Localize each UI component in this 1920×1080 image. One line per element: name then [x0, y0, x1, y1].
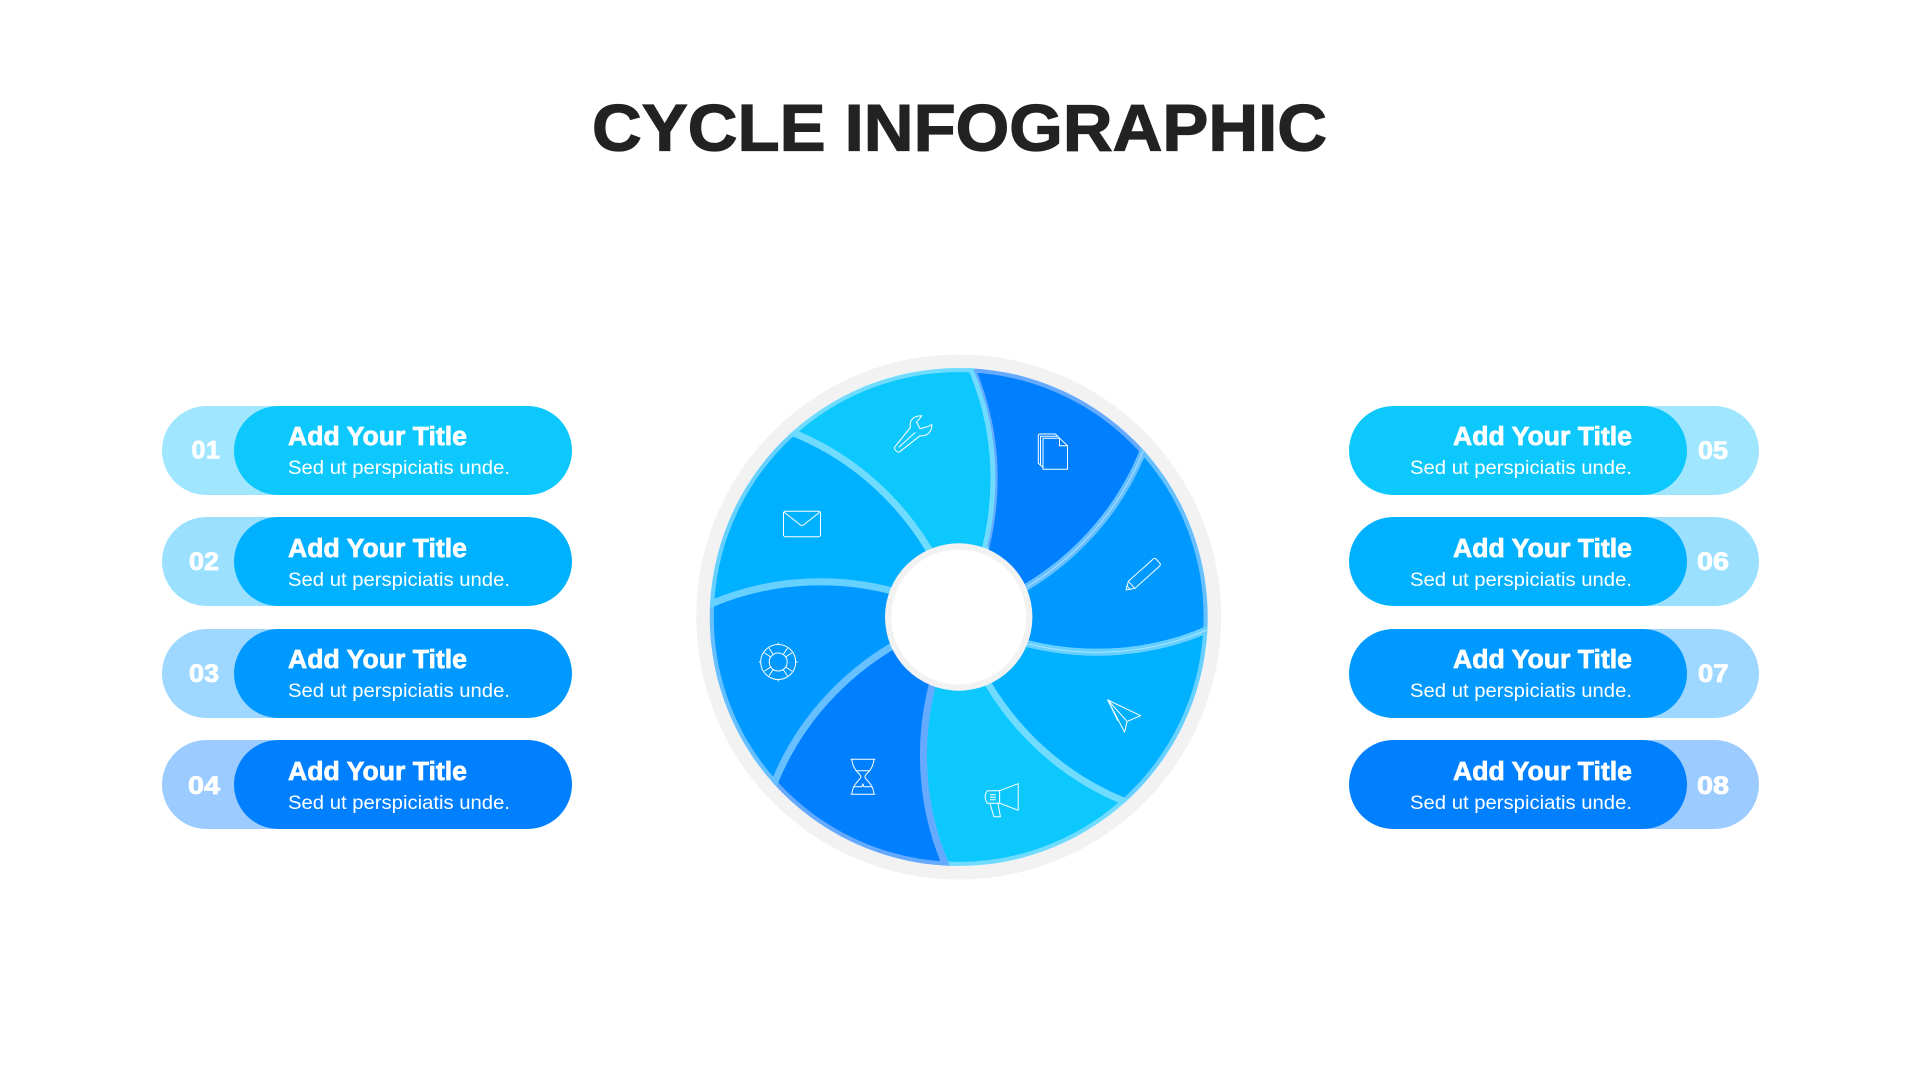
- blade: lifebuoy: [710, 585, 893, 787]
- item 03: Add Your Title: [288, 646, 467, 674]
- item 04: 04: [188, 772, 220, 800]
- item 03: Sed ut perspiciatis unde.: [288, 680, 510, 702]
- item 04: Sed ut perspiciatis unde.: [288, 792, 510, 814]
- item 03: 03: [189, 660, 219, 688]
- blade: document: [972, 369, 1143, 592]
- item 08: Add Your Title: [1453, 758, 1632, 786]
- item 08: Sed ut perspiciatis unde.: [1410, 792, 1632, 814]
- item 08: [1349, 740, 1759, 829]
- outer grey ring: [696, 354, 1221, 880]
- cycle wheel: [696, 354, 1221, 880]
- icon: envelope: [784, 511, 820, 537]
- item 05: 05: [1698, 437, 1728, 465]
- item 02: [162, 517, 572, 606]
- item 01: [162, 406, 572, 495]
- item 03: [162, 629, 572, 718]
- blade: paper plane: [984, 630, 1207, 802]
- blade: envelope: [711, 432, 933, 604]
- item 07: [1349, 629, 1759, 718]
- item 07: 07: [1698, 660, 1728, 688]
- item 06: Sed ut perspiciatis unde.: [1410, 569, 1632, 591]
- icon: paper plane: [1108, 700, 1141, 732]
- icon: pencil: [1123, 558, 1161, 593]
- blade: hourglass: [774, 642, 946, 865]
- item 08: 08: [1697, 772, 1729, 800]
- icon: megaphone: [985, 784, 1018, 817]
- item 05: Add Your Title: [1453, 423, 1632, 451]
- item 01: 01: [192, 436, 220, 464]
- item 02: Add Your Title: [288, 535, 467, 563]
- item 02: 02: [189, 548, 219, 576]
- item 01: Sed ut perspiciatis unde.: [288, 457, 510, 479]
- item 05: [1349, 406, 1759, 495]
- blades: [710, 368, 1208, 866]
- item 06: [1349, 517, 1759, 606]
- blade: megaphone: [926, 683, 1128, 866]
- icon: hourglass: [851, 759, 875, 794]
- item 02: Sed ut perspiciatis unde.: [288, 569, 510, 591]
- icon: documents: [1038, 434, 1068, 469]
- item 06: 06: [1697, 548, 1729, 576]
- icon: lifebuoy: [759, 643, 797, 681]
- centre hub: [885, 543, 1032, 691]
- item 07: Sed ut perspiciatis unde.: [1410, 680, 1632, 702]
- icon: wrench: [895, 416, 932, 452]
- blade: wrench: [789, 368, 998, 551]
- item 05: Sed ut perspiciatis unde.: [1410, 457, 1632, 479]
- item 01: Add Your Title: [288, 423, 467, 451]
- item 04: [162, 740, 572, 829]
- item 04: Add Your Title: [288, 758, 467, 786]
- item 06: Add Your Title: [1453, 535, 1632, 563]
- blade: pencil: [1024, 448, 1208, 649]
- item 07: Add Your Title: [1453, 646, 1632, 674]
- title: CYCLE INFOGRAPHIC: [592, 91, 1327, 165]
